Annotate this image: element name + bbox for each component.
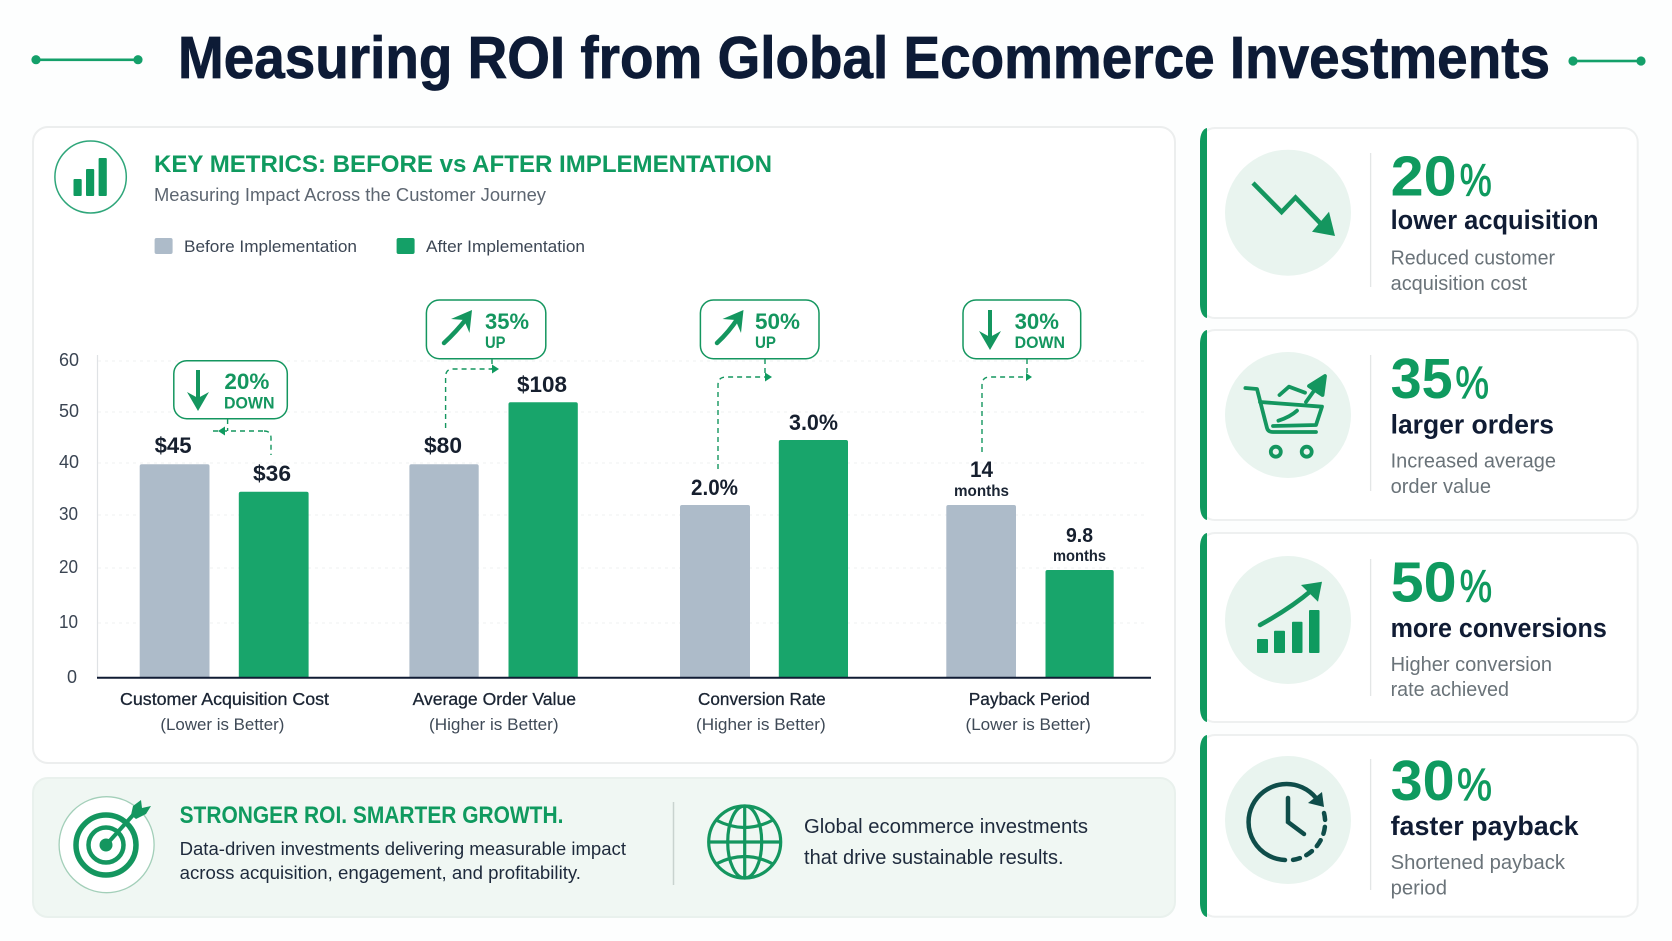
bars: average order value: $80 [424,433,462,458]
panel: lower acquisition stat card [1200,128,1638,318]
stat value [1391,145,1492,209]
stat description: Reduced customer [1391,247,1555,269]
y axis and gridlines: 10 [59,612,78,632]
bars: conversion rate [680,410,848,677]
stat value: 50 [1391,551,1457,615]
banner text: across acquisition, engagement, and profitability. [180,862,581,883]
callout: 30% down: DOWN [1015,334,1065,352]
stat label: lower acquisition [1391,205,1599,235]
legend: After Implementation [426,237,585,256]
y axis and gridlines: 60 [59,350,79,370]
panel: faster payback stat card [1200,735,1638,917]
y axis and gridlines: 0 [67,667,77,687]
banner closing text: Global ecommerce investments [804,816,1088,838]
panel: more conversions stat card [1200,533,1638,722]
bars: payback period [946,457,1114,677]
icon: clock with circular arrow [1249,784,1325,860]
y axis and gridlines: 50 [59,401,79,421]
banner text [180,838,626,883]
callout: 30% down [963,300,1081,452]
x axis labels: Payback Period [969,689,1090,709]
bars: average order value [409,372,578,677]
x axis labels: Conversion Rate [698,689,826,709]
icon: globe [709,806,781,878]
icon: target with arrow [59,797,154,893]
icon: shopping cart with rising arrow [1245,376,1325,457]
stat description: order value [1391,476,1491,498]
stat value [1391,551,1492,615]
callout: 20% down: DOWN [224,395,274,413]
stat label: larger orders [1391,410,1554,440]
icon: falling trend arrow [1253,183,1335,236]
bars: conversion rate: 3.0% [789,410,838,435]
icon: growth bars with arrow [1257,582,1322,653]
panel subheading: Measuring Impact Across the Customer Journey [154,185,546,205]
callout: 35% up [426,300,546,428]
bars: customer acquisition cost: $45 [155,433,192,458]
stat description: acquisition cost [1391,273,1527,295]
stat description [1391,247,1555,295]
stat value: 20 [1391,145,1457,209]
stat label: faster payback [1391,811,1580,841]
bar chart [59,350,1151,734]
stat value [1391,749,1492,813]
x axis labels: (Lower is Better) [966,716,1091,734]
stat label: more conversions [1391,613,1607,643]
stat value: % [1460,155,1492,206]
banner closing text: that drive sustainable results. [804,847,1064,869]
x axis labels: Average Order Value [413,689,576,709]
legend [155,237,585,256]
y axis and gridlines [59,350,1145,687]
title right accent line [1568,56,1646,66]
stat value: % [1455,357,1489,408]
panel: takeaway banner [33,778,1175,917]
callout: 20% down: 20% [224,369,269,394]
y axis and gridlines: 30 [59,504,78,524]
panel: key metrics chart [33,127,1175,763]
stat description: period [1391,878,1447,900]
panel: larger orders stat card [1200,330,1638,520]
legend: Before Implementation [184,237,357,256]
x axis labels: (Higher is Better) [429,716,559,734]
banner closing text [804,816,1088,869]
title: Measuring ROI from Global Ecommerce Investments [178,25,1550,91]
callout: 35% up: 35% [485,309,529,334]
stat description: Higher conversion [1391,654,1552,676]
x axis labels: (Higher is Better) [696,716,826,734]
stat description: Shortened payback [1391,852,1566,874]
callout: 20% down [174,361,287,455]
bars: average order value: $108 [517,372,567,397]
bars: payback period: 14 [970,457,994,482]
stat description [1391,450,1556,498]
banner heading: STRONGER ROI. SMARTER GROWTH. [180,802,563,829]
callout: 30% down: 30% [1015,309,1059,334]
bars: payback period: 9.8 [1066,525,1093,547]
stat value: 30 [1391,749,1455,813]
stat description: rate achieved [1391,679,1509,701]
stat description [1391,852,1566,900]
bars: payback period: months [954,483,1009,500]
x axis baseline [97,677,1151,679]
callout: 50% up: 50% [755,309,800,334]
bars: conversion rate: 2.0% [691,475,738,500]
banner text: Data-driven investments delivering measurable impact [180,838,626,859]
x axis labels: (Lower is Better) [160,716,284,734]
stat description [1391,654,1552,701]
stat value [1391,347,1489,411]
bars: customer acquisition cost [140,433,309,677]
panel heading: KEY METRICS: BEFORE vs AFTER IMPLEMENTATION [154,151,772,178]
stat value: % [1460,561,1492,612]
callout: 35% up: UP [485,334,506,352]
y axis and gridlines: 20 [59,557,78,577]
stat value: 35 [1391,347,1453,411]
stat value: % [1457,759,1492,810]
callout: 50% up: UP [755,334,776,352]
title left accent line [31,55,143,64]
stat description: Increased average [1391,450,1556,472]
x axis labels: Customer Acquisition Cost [120,689,329,709]
bars: customer acquisition cost: $36 [253,461,291,486]
icon: bar chart badge [55,141,126,213]
bars: payback period: months [1053,548,1106,565]
callout: 50% up [700,300,819,469]
x axis labels [120,689,1091,734]
y axis and gridlines: 40 [59,452,79,472]
